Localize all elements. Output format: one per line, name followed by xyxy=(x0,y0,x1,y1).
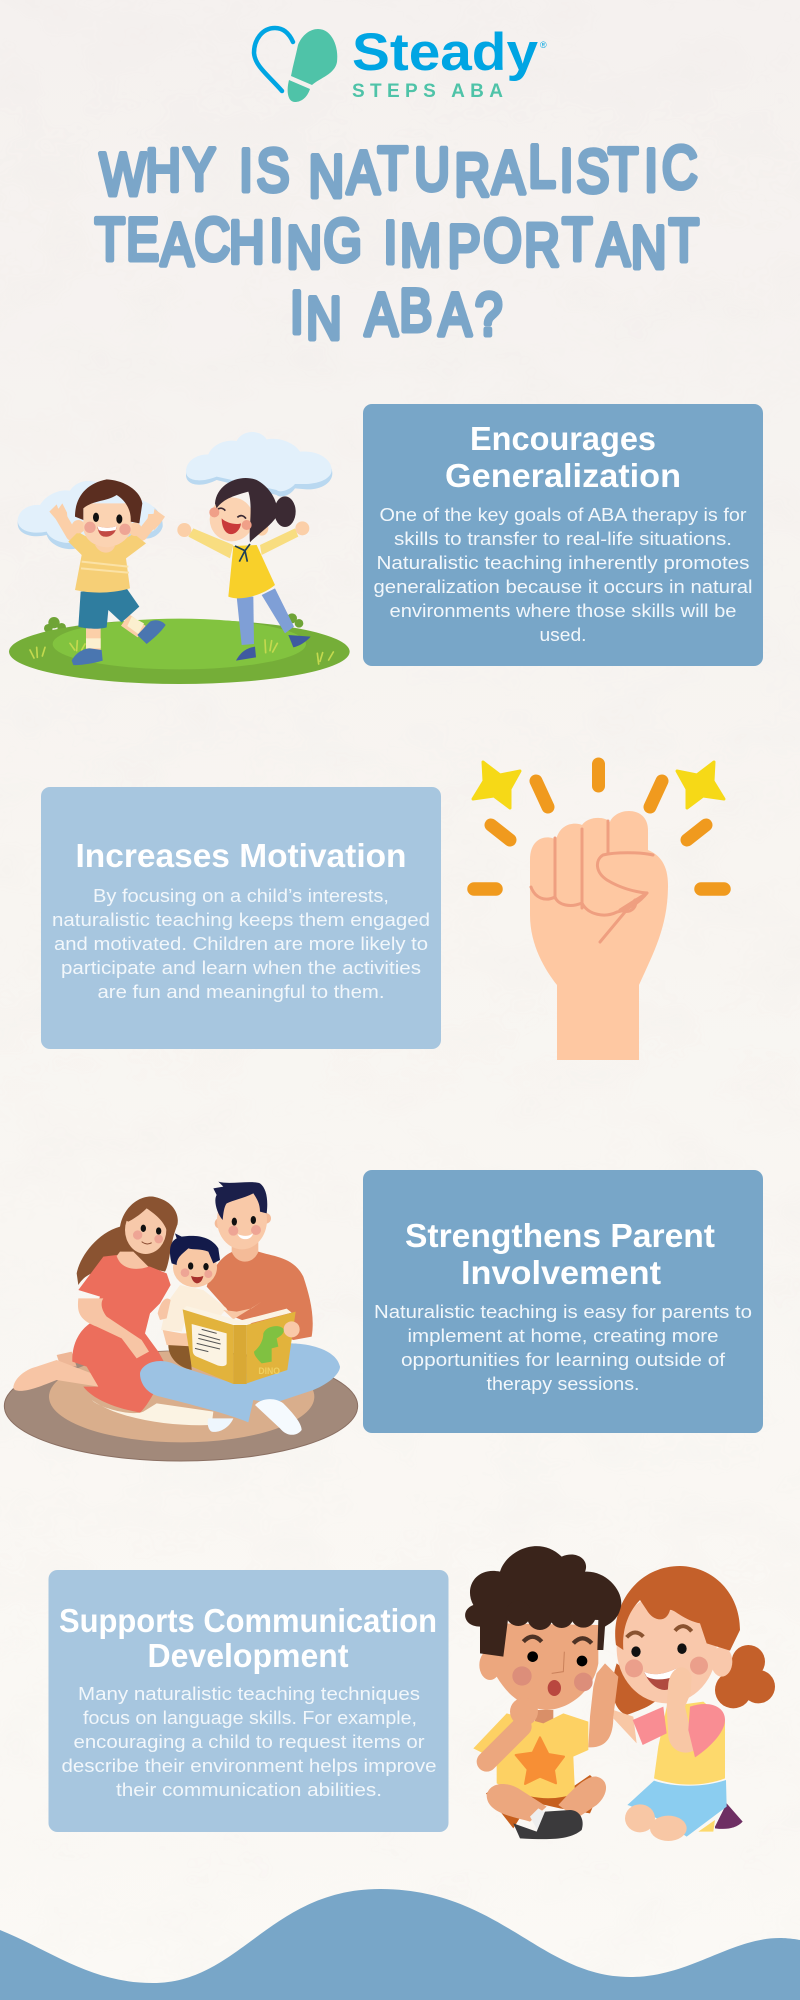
panel body text xyxy=(62,1684,436,1800)
panel body text: their communication abilities. xyxy=(116,1780,382,1800)
girl whispering xyxy=(613,1566,775,1841)
logo wordmark: Steady xyxy=(352,23,539,82)
panel body text: Many naturalistic teaching techniques xyxy=(78,1684,420,1704)
panel body text: One of the key goals of ABA therapy is for xyxy=(380,505,746,525)
logo: Steady Steps ABA xyxy=(254,23,547,102)
panel heading xyxy=(445,420,681,494)
open picture book xyxy=(183,1306,300,1384)
registered mark: ® xyxy=(540,40,547,50)
title: IN ABA? xyxy=(290,276,502,352)
panel body text: Naturalistic teaching inherently promotes xyxy=(376,553,750,573)
panel body text: Naturalistic teaching is easy for parents to xyxy=(374,1302,752,1322)
panel background xyxy=(363,404,763,666)
panel: strengthens parent involvement xyxy=(363,1170,763,1433)
panel body text: describe their environment helps improve xyxy=(62,1756,436,1776)
title xyxy=(95,132,699,352)
father upper body xyxy=(207,1182,313,1340)
panel body text xyxy=(374,1302,752,1394)
panel heading: Generalization xyxy=(445,457,681,494)
panel body text: are fun and meaningful to them. xyxy=(98,982,384,1002)
panel body text xyxy=(52,886,430,1002)
cloud right xyxy=(186,432,332,496)
illustration: family reading a book on a rug xyxy=(4,1182,358,1461)
panel heading xyxy=(405,1217,715,1291)
panel body text: focus on language skills. For example, xyxy=(83,1708,417,1728)
burst dashes xyxy=(474,764,724,889)
panel body text: participate and learn when the activities xyxy=(61,958,421,978)
mother xyxy=(13,1197,178,1413)
panel body text: environments where those skills will be xyxy=(390,601,736,621)
girl xyxy=(177,478,311,661)
panel body text: therapy sessions. xyxy=(486,1374,640,1394)
panel body text: opportunities for learning outside of xyxy=(401,1350,726,1370)
icon: footprint xyxy=(288,29,337,102)
panel background xyxy=(48,1570,448,1832)
panel body text: skills to transfer to real-life situations. xyxy=(394,529,732,549)
panel body text: By focusing on a child’s interests, xyxy=(93,886,389,906)
panel body text: generalization because it occurs in natural xyxy=(374,577,752,597)
logo tagline: STEPS ABA xyxy=(352,81,503,102)
panel: supports communication development xyxy=(48,1570,448,1832)
title: WHY IS NATURALISTIC xyxy=(100,132,698,210)
panel background xyxy=(41,787,441,1049)
title: TEACHING IMPORTANT xyxy=(95,205,699,281)
panel heading: Development xyxy=(148,1637,349,1674)
panel heading: Increases Motivation xyxy=(76,837,406,874)
panel heading: Strengthens Parent xyxy=(405,1217,715,1254)
icon: right star xyxy=(677,762,724,808)
panel body text xyxy=(374,505,752,645)
bottom wave xyxy=(0,1889,800,2000)
boy reader xyxy=(158,1233,262,1370)
panel body text: naturalistic teaching keeps them engaged xyxy=(52,910,430,930)
panel background xyxy=(363,1170,763,1433)
panel body text: and motivated. Children are more likely to xyxy=(54,934,428,954)
panel heading: Involvement xyxy=(461,1254,661,1291)
panel heading: Supports Communication xyxy=(59,1602,437,1639)
panel: encourages generalization xyxy=(363,404,763,666)
illustration: two children playing on grass xyxy=(9,432,350,684)
cloud left xyxy=(18,481,163,549)
panel heading xyxy=(59,1602,437,1674)
grass mound xyxy=(9,613,350,684)
rug xyxy=(4,1351,358,1461)
book cover label: DINO xyxy=(258,1366,280,1376)
illustration: raised fist with stars xyxy=(473,762,724,1060)
panel body text: used. xyxy=(540,625,586,645)
father crossed legs xyxy=(140,1343,340,1435)
panel: increases motivation xyxy=(41,787,441,1049)
panel body text: encouraging a child to request items or xyxy=(74,1732,424,1752)
boy xyxy=(49,479,166,665)
illustration: children whispering xyxy=(465,1546,775,1841)
panel heading: Encourages xyxy=(470,420,656,457)
boy listening xyxy=(465,1546,621,1839)
fist outline details xyxy=(531,821,653,942)
icon: left star xyxy=(473,762,520,808)
fist xyxy=(530,811,668,1060)
panel body text: implement at home, creating more xyxy=(408,1326,718,1346)
icon: heart outline xyxy=(254,28,293,91)
